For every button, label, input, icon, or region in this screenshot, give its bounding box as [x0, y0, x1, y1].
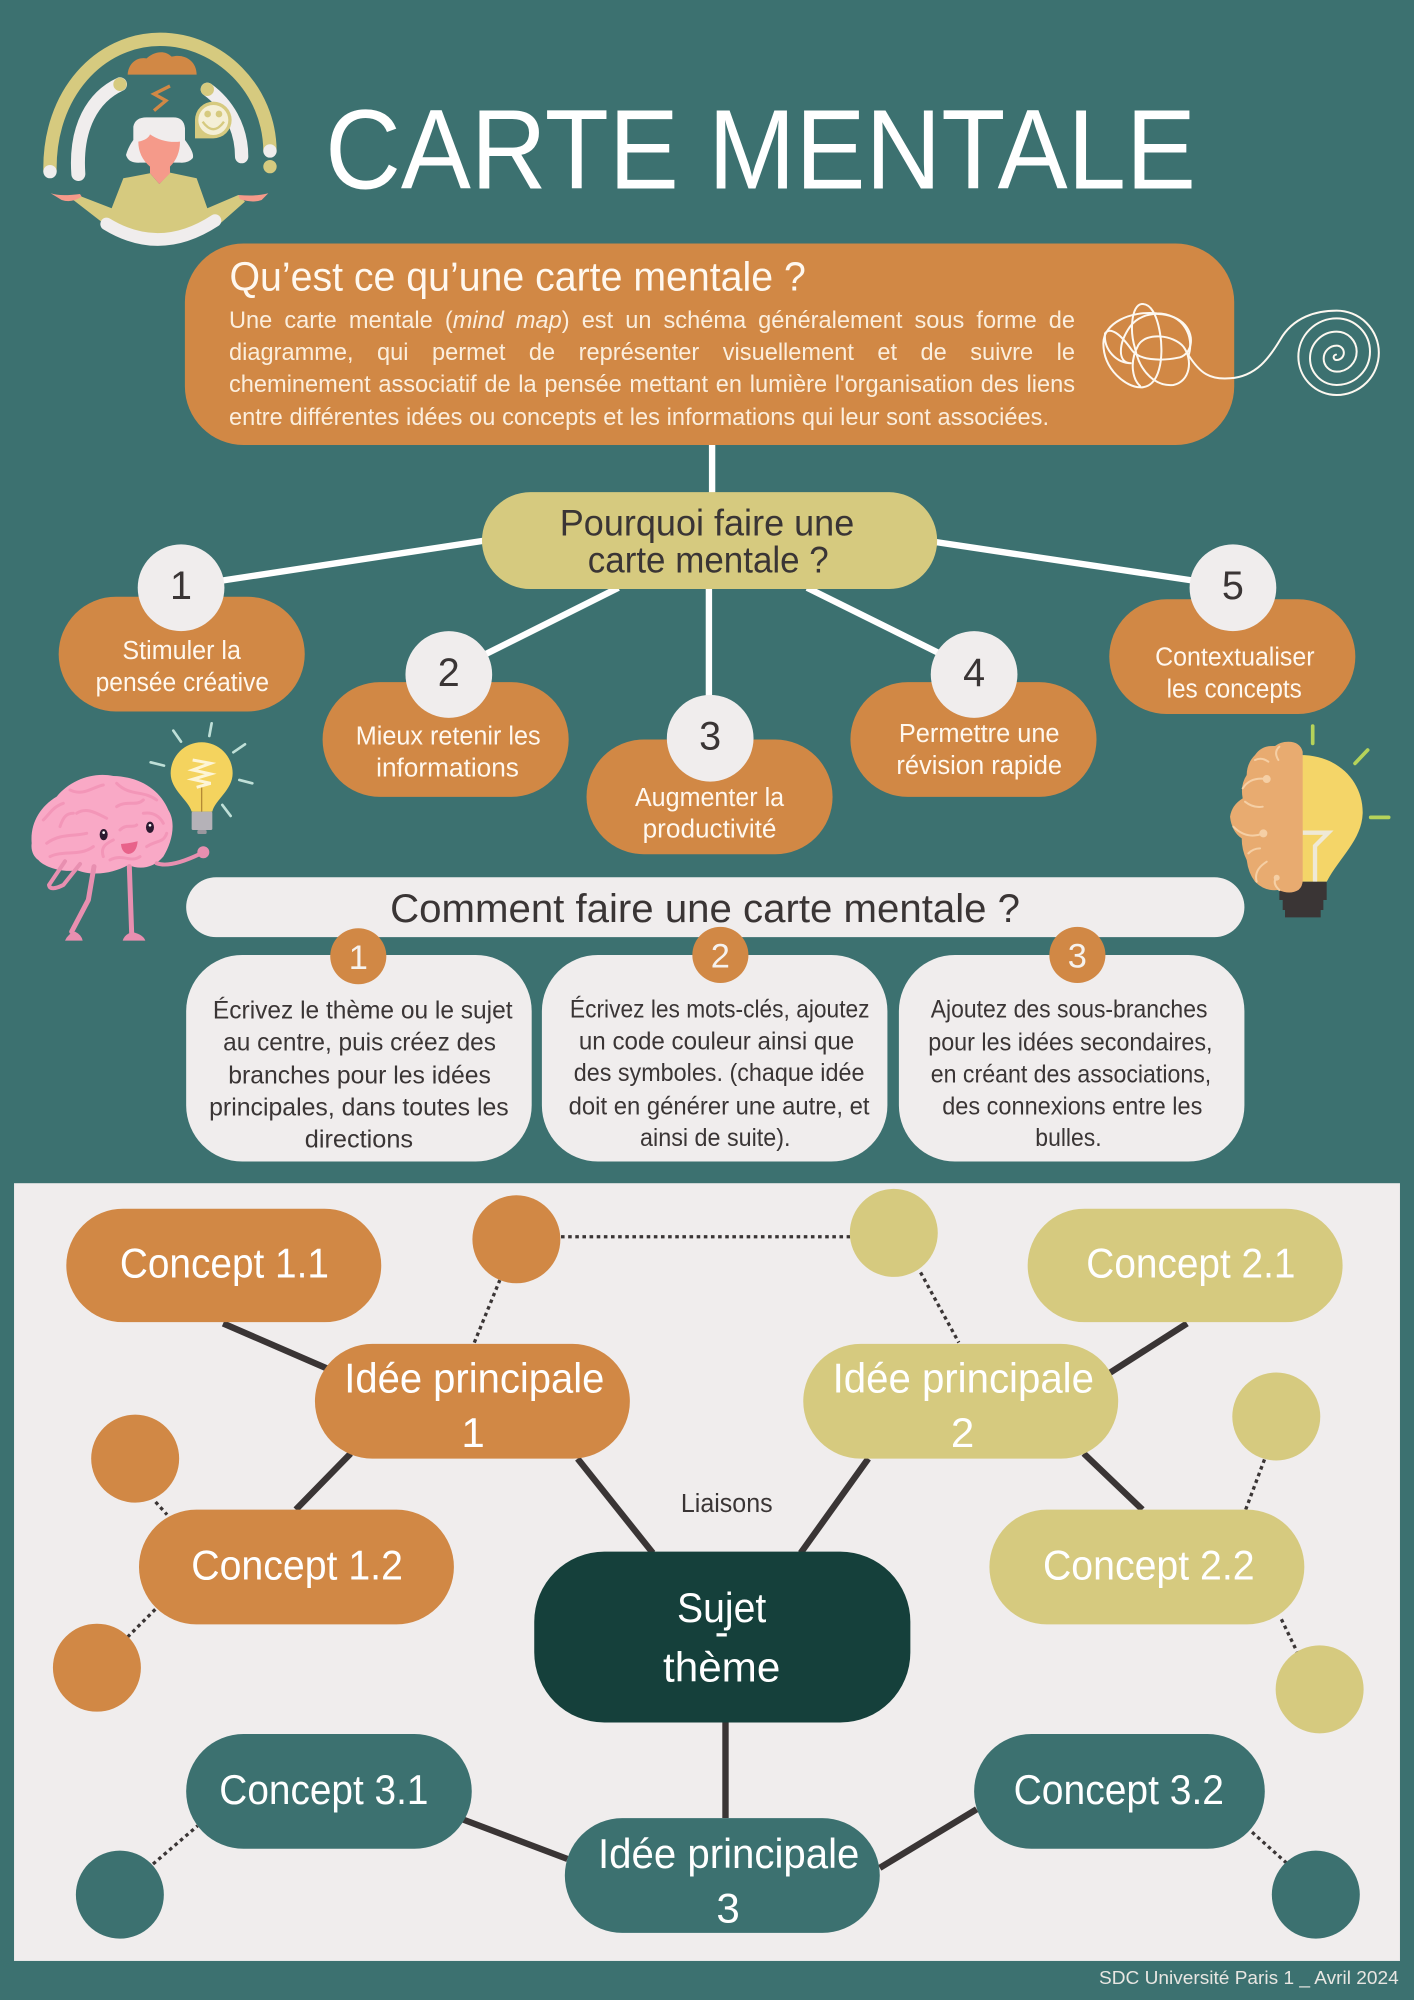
- heading: how to make: Comment faire une carte mentale ?: [390, 887, 1020, 931]
- reason 2: [323, 631, 569, 797]
- step card 2: Écrivez les mots-clés, ajoutez: [570, 994, 870, 1023]
- footer credit: SDC Université Paris 1 _ Avril 2024: [1099, 1967, 1399, 1989]
- concept 2.1: [1028, 1209, 1343, 1322]
- step card 2: 2: [711, 938, 730, 976]
- main idea 1: 1: [461, 1409, 485, 1456]
- concept 3.1: Concept 3.1: [219, 1766, 428, 1813]
- step card 1: directions: [305, 1125, 413, 1153]
- concept 3.2: [974, 1734, 1265, 1849]
- heading: definition: Qu’est ce qu’une carte mentale ?: [230, 254, 806, 300]
- step card 2: ainsi de suite).: [640, 1124, 791, 1152]
- main idea 2: 2: [951, 1409, 974, 1456]
- concept 1.1: [66, 1209, 381, 1322]
- connector: definition to question: [709, 440, 715, 497]
- step card 3: bulles.: [1035, 1124, 1102, 1152]
- main idea 3: 3: [716, 1885, 740, 1932]
- question pill: carte mentale ?: [588, 539, 829, 580]
- panel: mind map example: [14, 1183, 1400, 1961]
- reason 2: Mieux retenir les: [356, 723, 541, 751]
- reason 2: informations: [376, 754, 519, 782]
- reason 5: [1109, 544, 1355, 714]
- reason 1: pensée créative: [96, 669, 269, 697]
- question pill: Pourquoi faire une: [560, 502, 854, 543]
- reason 4: révision rapide: [896, 752, 1062, 780]
- concept 3.2: Concept 3.2: [1014, 1766, 1224, 1813]
- dotted links: [128, 1237, 1298, 1864]
- text block: definition paragraph: cheminement associatif de la pensée mettant en lumière l'organisation des liens: [229, 372, 1075, 398]
- main idea 2: Idée principale: [833, 1354, 1094, 1401]
- main idea 1: [315, 1344, 630, 1459]
- reason 5: les concepts: [1167, 675, 1302, 703]
- concept 2.1: Concept 2.1: [1086, 1240, 1295, 1287]
- central topic: Sujet: [677, 1584, 767, 1631]
- title: CARTE MENTALE: [325, 87, 1196, 214]
- reason 2: 2: [438, 651, 460, 695]
- concept 1.2: Concept 1.2: [191, 1542, 403, 1589]
- step card 3: 3: [1068, 938, 1087, 976]
- panel: definition: [185, 244, 1234, 445]
- concept 2.2: Concept 2.2: [1043, 1542, 1255, 1589]
- concept 3.1: [186, 1734, 472, 1849]
- reason 5: 5: [1222, 564, 1244, 608]
- icon: brain character with bulb: [31, 723, 252, 941]
- step card 1: principales, dans toutes les: [209, 1094, 509, 1122]
- step card 3: en créant des associations,: [931, 1060, 1211, 1088]
- label: links: Liaisons: [681, 1490, 773, 1518]
- step card 2: un code couleur ainsi que: [579, 1027, 854, 1055]
- central topic: thème: [663, 1644, 780, 1691]
- reason 3: [587, 695, 833, 854]
- icon: half brain half bulb: [1230, 726, 1389, 917]
- text block: definition paragraph: entre différentes idées ou concepts et les informations qui leur sont associées.: [229, 405, 1049, 431]
- reason 3: 3: [699, 715, 721, 759]
- icon: tangled line to spiral: [1103, 304, 1379, 395]
- step card 1: 1: [349, 939, 368, 977]
- solid branches: [223, 1323, 1187, 1868]
- concept 1.1: Concept 1.1: [120, 1240, 329, 1287]
- reason 1: [59, 544, 305, 711]
- reason 5: Contextualiser: [1155, 644, 1315, 672]
- heading: how to make: [186, 877, 1244, 937]
- main idea 1: Idée principale: [344, 1354, 604, 1401]
- step card 3: des connexions entre les: [942, 1092, 1202, 1120]
- concept 2.2: [989, 1510, 1304, 1624]
- central topic: [534, 1552, 910, 1723]
- reason 1: Stimuler la: [122, 637, 242, 665]
- step card 2: doit en générer une autre, et: [569, 1092, 870, 1120]
- step card 1: Écrivez le thème ou le sujet: [213, 996, 513, 1025]
- reason 4: 4: [963, 651, 985, 695]
- text block: definition paragraph: diagramme, qui permet de représenter visuellement et de suivre le: [229, 340, 1075, 366]
- step card 3: Ajoutez des sous-branches: [931, 995, 1207, 1023]
- step card 1: branches pour les idées: [228, 1062, 491, 1090]
- text block: definition paragraph: Une carte mentale (mind map) est un schéma généralement sous forme de: [229, 308, 1075, 334]
- step card 2: des symboles. (chaque idée: [574, 1059, 864, 1087]
- step card 3: pour les idées secondaires,: [928, 1029, 1213, 1057]
- reason 4: [850, 631, 1097, 797]
- step card 2: [542, 927, 887, 1162]
- step card 1: au centre, puis créez des: [223, 1029, 496, 1057]
- reason 3: productivité: [643, 816, 776, 844]
- step card 1: [186, 928, 532, 1162]
- secondary bubbles: [53, 1189, 1364, 1939]
- main idea 2: [803, 1344, 1118, 1459]
- step card 3: [899, 927, 1244, 1162]
- main idea 3: [565, 1818, 880, 1933]
- main idea 3: Idée principale: [598, 1830, 859, 1877]
- text block: definition paragraph: [229, 308, 1075, 431]
- connectors: question to reasons: [217, 541, 1199, 701]
- reason 1: 1: [170, 564, 192, 608]
- reason 3: Augmenter la: [635, 784, 785, 812]
- icon: person juggling thoughts: [43, 39, 277, 240]
- question pill: [482, 492, 937, 589]
- reason 4: Permettre une: [899, 720, 1060, 748]
- central topic: -: [715, 1608, 729, 1655]
- concept 1.2: [139, 1510, 454, 1624]
